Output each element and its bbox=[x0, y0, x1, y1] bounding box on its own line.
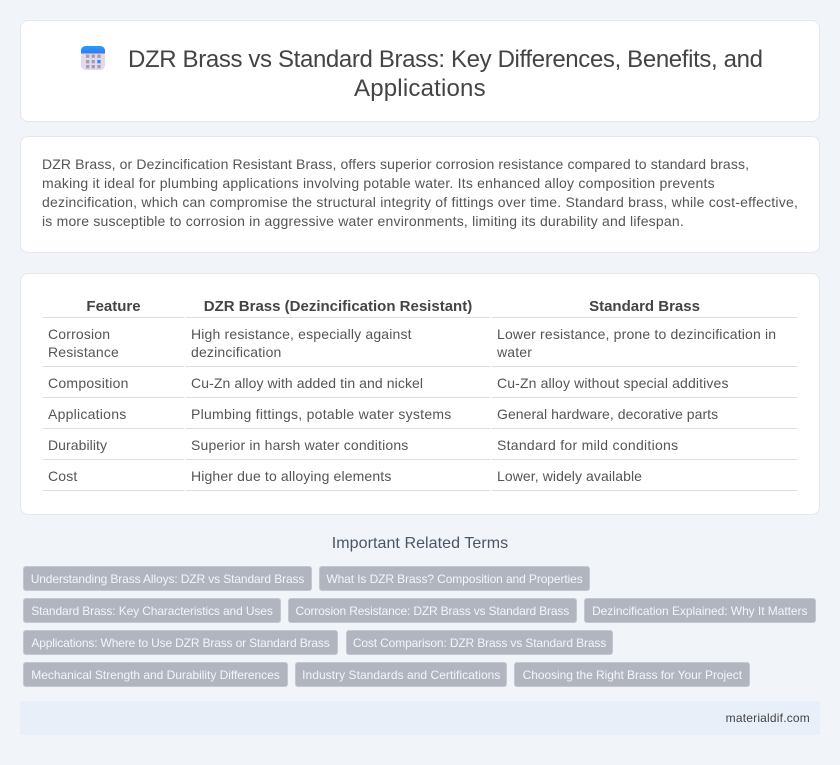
panel: comparison table: Higher due to alloying elements bbox=[191, 468, 391, 484]
title bbox=[128, 46, 763, 102]
panel: comparison table: DZR Brass (Dezincification Resistant) bbox=[204, 298, 472, 315]
row: composition: Composition bbox=[48, 375, 129, 391]
panel: comparison table: Cu-Zn alloy with added tin and nickel bbox=[191, 375, 423, 391]
text block: introduction: DZR Brass, or Dezincification Resistant Brass, offers superior corrosion resistance compared to standard brass, bbox=[42, 156, 749, 172]
panel: comparison table: Lower, widely available bbox=[497, 468, 642, 484]
panel: comparison table: Lower resistance, prone to dezincification in bbox=[497, 326, 776, 342]
table header: Feature bbox=[86, 298, 141, 315]
tags: related terms bbox=[23, 566, 816, 687]
panel: comparison table: water bbox=[497, 344, 532, 360]
panel: title card bbox=[20, 20, 820, 122]
panel: comparison table: General hardware, decorative parts bbox=[497, 406, 718, 422]
panel: comparison table: Standard for mild conditions bbox=[497, 437, 678, 453]
panel: comparison table: Superior in harsh water conditions bbox=[191, 437, 408, 453]
title: DZR Brass vs Standard Brass: Key Differences, Benefits, and bbox=[128, 46, 763, 73]
panel: comparison table: High resistance, especially against bbox=[191, 326, 412, 342]
tags: related terms: Applications: Where to Use DZR Brass or Standard Brass bbox=[31, 636, 330, 650]
tags: related terms: Choosing the Right Brass for Your Project bbox=[523, 668, 742, 682]
panel: comparison table bbox=[20, 273, 820, 515]
footer source: materialdif.com bbox=[726, 711, 810, 725]
panel: comparison table: Plumbing fittings, potable water systems bbox=[191, 406, 452, 422]
text block: introduction bbox=[42, 156, 798, 229]
tags: related terms: Mechanical Strength and Durability Differences bbox=[31, 668, 280, 682]
text block: introduction: is more susceptible to corrosion in aggressive water environments, limiting its durability and lifespan. bbox=[42, 213, 684, 229]
tags: related terms: What Is DZR Brass? Composition and Properties bbox=[326, 572, 583, 586]
row: durability: Durability bbox=[48, 437, 107, 453]
text block: introduction: dezincification, which can compromise the structural integrity of fittings over time. Standard brass, while cost-effective, bbox=[42, 194, 798, 210]
panel: comparison table: dezincification bbox=[191, 344, 282, 360]
tags: related terms: Standard Brass: Key Characteristics and Uses bbox=[31, 604, 273, 618]
heading: related terms: Important Related Terms bbox=[332, 535, 508, 552]
icon: calendar bbox=[81, 46, 105, 70]
title: Applications bbox=[354, 75, 486, 102]
tags: related terms: Dezincification Explained: Why It Matters bbox=[592, 604, 807, 618]
panel: comparison table: Standard Brass bbox=[589, 298, 700, 315]
row: corrosion resistance: Resistance bbox=[48, 344, 119, 360]
footer bbox=[20, 701, 820, 735]
tags: related terms: Corrosion Resistance: DZR Brass vs Standard Brass bbox=[295, 604, 569, 618]
row: corrosion resistance: Corrosion bbox=[48, 326, 110, 342]
tags: related terms: Industry Standards and Certifications bbox=[302, 668, 500, 682]
row: corrosion resistance bbox=[48, 326, 119, 360]
row: cost: Cost bbox=[48, 468, 77, 484]
panel: comparison table: Cu-Zn alloy without special additives bbox=[497, 375, 729, 391]
text block: introduction: making it ideal for plumbing applications involving potable water. Its enhanced alloy composition prevents bbox=[42, 175, 715, 191]
panel: introduction bbox=[20, 136, 820, 253]
tags: related terms: Cost Comparison: DZR Brass vs Standard Brass bbox=[353, 636, 606, 650]
row: applications: Applications bbox=[48, 406, 126, 422]
tags: related terms: Understanding Brass Alloys: DZR vs Standard Brass bbox=[31, 572, 304, 586]
